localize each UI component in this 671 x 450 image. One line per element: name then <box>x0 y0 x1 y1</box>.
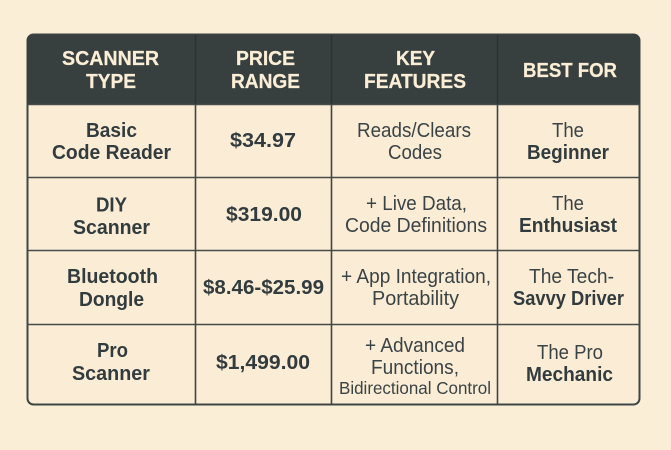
scanner type: Scanner <box>72 362 150 385</box>
scanner type <box>73 194 150 239</box>
scanner type <box>72 339 150 385</box>
best for <box>526 341 613 386</box>
best for: Savvy Driver <box>513 287 624 310</box>
best for: The Tech- <box>529 265 614 288</box>
best for: The <box>552 192 584 215</box>
header: price range: RANGE <box>231 70 300 93</box>
best for <box>519 192 617 237</box>
scanner type: Basic <box>86 119 137 142</box>
scanner type: DIY <box>96 194 127 216</box>
features: Bidirectional Control <box>339 378 491 398</box>
scanner type: Scanner <box>73 216 150 239</box>
row: pro scanner <box>72 334 613 398</box>
header: scanner type: SCANNER <box>62 47 159 70</box>
header: key features: KEY <box>396 47 435 70</box>
scanner type <box>67 265 158 311</box>
features: Code Definitions <box>345 214 487 237</box>
row: DIY scanner <box>73 192 617 239</box>
features <box>345 192 487 237</box>
scanner type: Bluetooth <box>67 265 158 288</box>
scanner type: Code Reader <box>52 141 171 164</box>
header: scanner type <box>62 47 159 93</box>
features: + Live Data, <box>366 192 467 215</box>
price: $34.97 <box>230 129 296 152</box>
features <box>341 265 491 310</box>
best for <box>513 265 624 310</box>
features: + App Integration, <box>341 265 491 288</box>
price: $319.00 <box>226 203 302 226</box>
scanner type: Dongle <box>79 288 144 311</box>
header: price range: PRICE <box>236 47 295 70</box>
best for: Beginner <box>527 141 609 164</box>
features <box>339 334 491 398</box>
best for: The Pro <box>537 341 603 364</box>
features <box>357 119 471 164</box>
price: $8.46-$25.99 <box>203 276 324 299</box>
header: key features <box>364 47 466 93</box>
best for: Mechanic <box>526 363 613 386</box>
row: basic code reader <box>52 119 609 164</box>
header band <box>27 34 640 104</box>
header: key features: FEATURES <box>364 70 466 93</box>
features: + Advanced <box>365 334 465 357</box>
price: $1,499.00 <box>216 351 310 374</box>
features: Reads/Clears <box>357 119 471 142</box>
header: price range <box>231 47 300 93</box>
header: best for: BEST FOR <box>523 59 617 82</box>
features: Codes <box>388 141 442 164</box>
features: Functions, <box>371 356 459 379</box>
best for: Enthusiast <box>519 214 617 237</box>
best for: The <box>552 119 584 142</box>
features: Portability <box>372 287 460 310</box>
header row <box>62 47 617 93</box>
table body panel <box>28 34 640 404</box>
row: bluetooth dongle <box>67 265 624 311</box>
scanner type: Pro <box>97 339 128 362</box>
best for <box>527 119 609 164</box>
scanner type <box>52 119 171 164</box>
header: scanner type: TYPE <box>86 70 136 93</box>
